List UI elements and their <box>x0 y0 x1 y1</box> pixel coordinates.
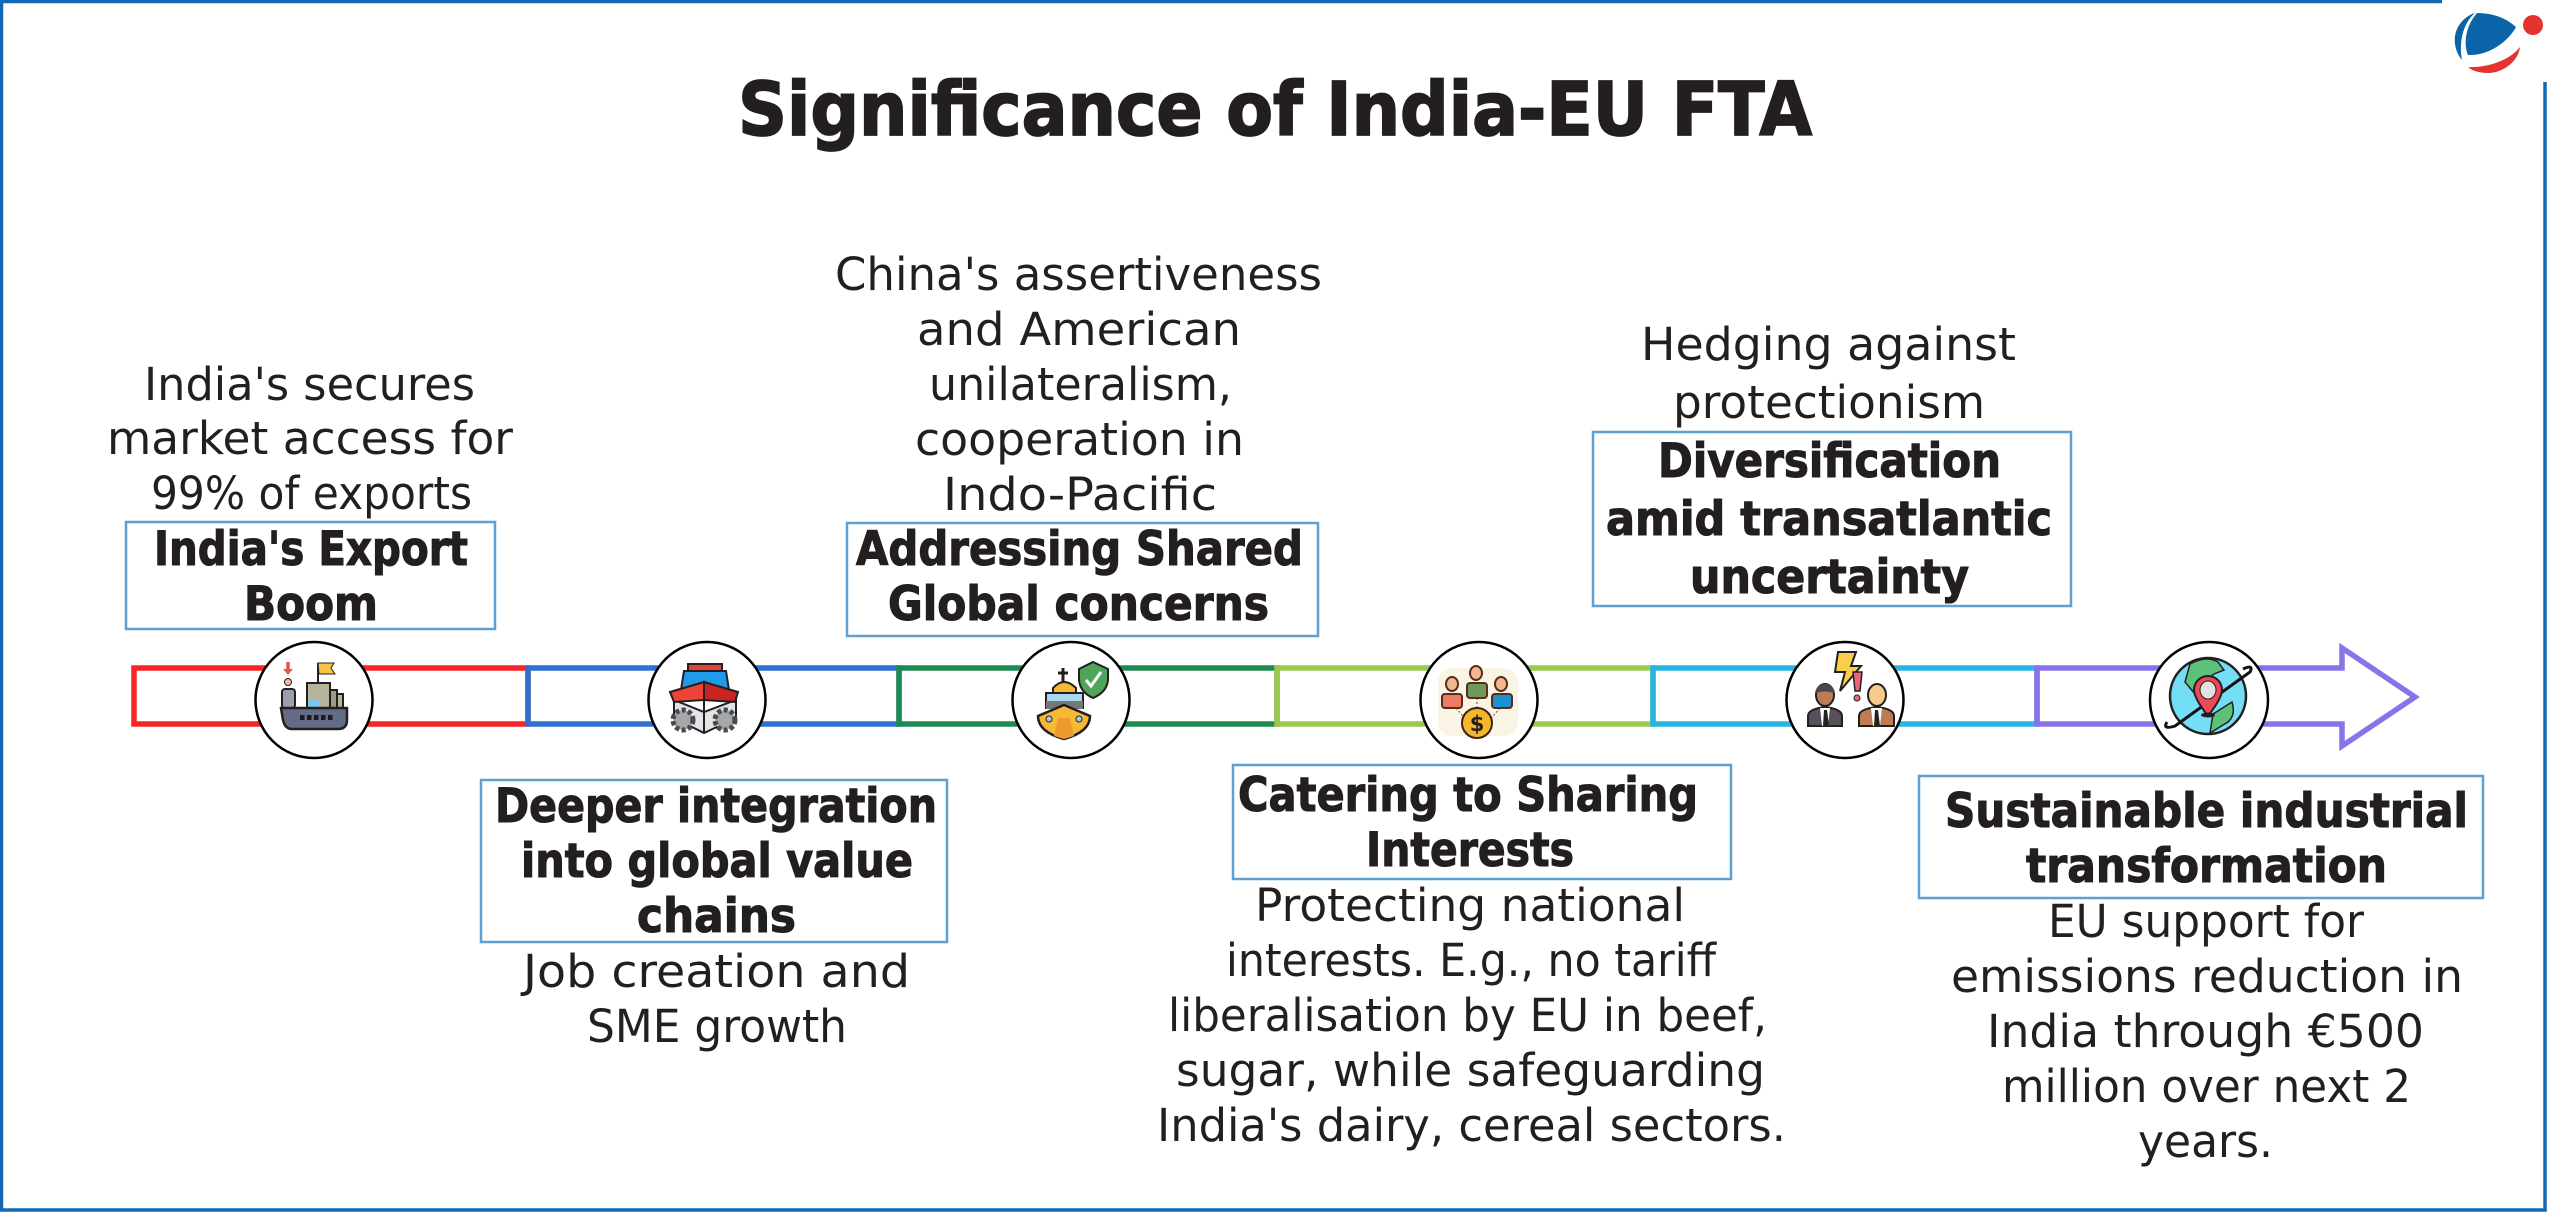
description 6: EU support for <box>2048 895 2364 948</box>
heading box 6: transformation <box>2026 839 2387 894</box>
heading box 3: Global concerns <box>888 577 1269 632</box>
description 6: million over next 2 <box>2002 1060 2411 1113</box>
icon: globe with location pin <box>2150 642 2268 758</box>
milestone 1: India's Export Boom <box>107 358 513 758</box>
milestone 2: Deeper integration <box>481 642 947 1053</box>
description 5: Hedging against <box>1641 318 2016 371</box>
heading box 6: Sustainable industrial <box>1945 784 2468 839</box>
heading box 1: Boom <box>244 577 378 632</box>
description 4: interests. E.g., no tariff <box>1226 934 1717 987</box>
description 6 <box>1951 895 2463 1168</box>
description 6: emissions reduction in <box>1951 950 2463 1003</box>
description 3: Indo-Pacific <box>943 468 1217 521</box>
milestone 4: Catering to Sharing Interests <box>1157 642 1786 1152</box>
heading box 1: India's Export <box>154 522 468 577</box>
description 1 <box>107 358 513 520</box>
description 2: Job creation and <box>520 945 910 998</box>
icon: cargo ship <box>256 642 372 758</box>
icon: stakeholders and coin: $ <box>1470 712 1484 736</box>
icon: two people in conflict <box>1786 642 1904 758</box>
icon: ship with gears <box>648 642 766 758</box>
description 4: Protecting national <box>1255 879 1685 932</box>
description 4: sugar, while safeguarding <box>1176 1044 1765 1097</box>
title: Significance of India-EU FTA <box>738 67 1812 153</box>
heading box 6 <box>1919 776 2483 898</box>
description 2 <box>520 945 910 1053</box>
heading box 2: chains <box>637 889 796 944</box>
icon: stakeholders and coin <box>1420 642 1538 758</box>
heading box 1 <box>126 522 495 632</box>
heading box 2 <box>481 779 947 944</box>
heading box 5: amid transatlantic <box>1606 492 2052 547</box>
heading box 2: into global value <box>521 834 913 889</box>
description 1: 99% of exports <box>151 467 472 520</box>
description 5: protectionism <box>1673 376 1985 429</box>
milestone 6: Sustainable industrial transformation <box>1919 642 2483 1168</box>
description 6: years. <box>2138 1115 2273 1168</box>
description 3: cooperation in <box>915 413 1244 466</box>
description 4: India's dairy, cereal sectors. <box>1157 1099 1786 1152</box>
description 3 <box>835 248 1322 521</box>
milestone 5: Diversification amid transatlantic uncertainty <box>1593 318 2071 758</box>
description 4: liberalisation by EU in beef, <box>1168 989 1767 1042</box>
description 4 <box>1157 879 1786 1152</box>
heading box 2: Deeper integration <box>495 779 937 834</box>
heading box 5 <box>1593 432 2071 606</box>
logo <box>2455 13 2543 73</box>
description 5 <box>1641 318 2016 429</box>
description 2: SME growth <box>587 1000 847 1053</box>
milestone 3: Addressing Shared Global concerns <box>835 248 1322 758</box>
icon: ship with shield <box>1012 642 1130 758</box>
heading box 4 <box>1233 765 1731 879</box>
description 1: market access for <box>107 412 513 465</box>
heading box 3 <box>847 522 1318 636</box>
timeline arrow bar <box>134 648 2415 746</box>
heading box 4: Catering to Sharing <box>1238 768 1698 823</box>
description 3: unilateralism, <box>929 358 1232 411</box>
heading box 5: uncertainty <box>1690 550 1969 605</box>
description 3: China's assertiveness <box>835 248 1322 301</box>
description 6: India through €500 <box>1987 1005 2424 1058</box>
heading box 3: Addressing Shared <box>856 522 1303 577</box>
description 3: and American <box>917 303 1241 356</box>
description 1: India's secures <box>144 358 475 411</box>
heading box 4: Interests <box>1366 823 1574 878</box>
heading box 5: Diversification <box>1658 434 2001 489</box>
